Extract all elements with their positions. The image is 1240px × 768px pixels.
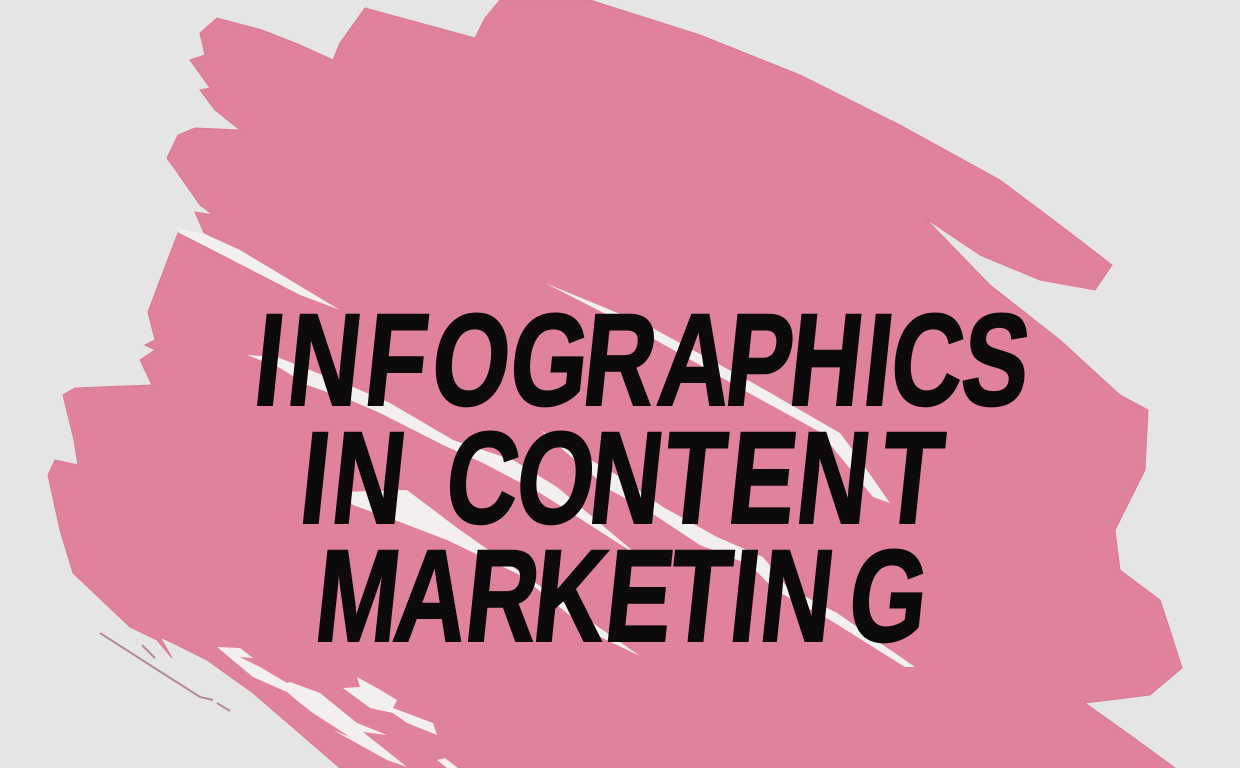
title [248,286,1037,669]
title line: IN CONTENT: IN CONTENT [294,404,950,551]
title line: INFOGRAPHICS: INFOGRAPHICS [248,286,1037,433]
title line: MARKETING: MARKETING [309,522,935,669]
stray bristle marks [100,633,230,711]
white brush slashes [178,228,915,768]
